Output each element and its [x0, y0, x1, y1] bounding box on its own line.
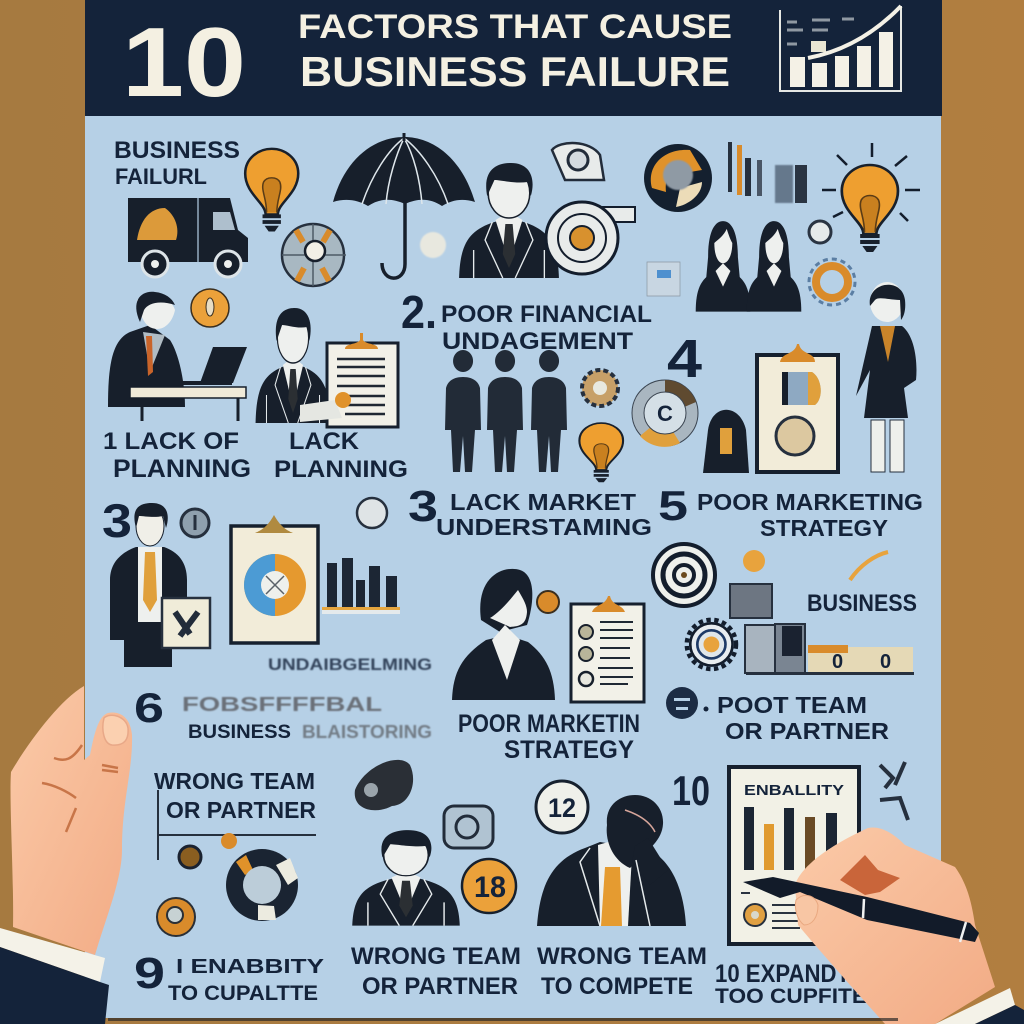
caption: faded understanding: UNDAIBGELMING — [268, 655, 432, 674]
heading: factor 1: 1 LACK OF — [103, 428, 239, 455]
icon: dark cluster — [355, 760, 493, 848]
heading: factor 3: UNDERSTAMING — [436, 514, 652, 540]
bar chart — [322, 558, 400, 614]
figure: man with orange tie — [110, 503, 210, 667]
icon: number 12 badge — [536, 781, 588, 833]
icon: delivery truck — [128, 198, 248, 277]
icon: small gauge — [357, 498, 387, 528]
heading: factor 1 — [103, 428, 251, 483]
title — [298, 8, 732, 95]
icon: service dial — [226, 849, 298, 921]
headline number 10: 10 — [122, 7, 246, 117]
icon: dial — [282, 224, 346, 286]
label: business failure: FAILURL — [115, 164, 207, 189]
heading: factor 5: POOR MARKETING — [697, 489, 923, 515]
icon: lightbulb center — [579, 423, 623, 482]
chart card: ENBALLITY — [744, 782, 844, 799]
figure: man with orange badge: 18 — [474, 871, 506, 904]
heading: inability to cupality: TO CUPALTTE — [168, 982, 318, 1005]
icon: small gears — [809, 221, 855, 305]
heading: factor 5 left: FOBSFFFFBAL — [182, 694, 382, 716]
heading: poor marketing — [458, 710, 640, 764]
heading: inability to cupality: 9 — [134, 949, 165, 998]
icon: donut chart — [644, 144, 712, 212]
icon: dark pawn — [703, 410, 749, 473]
heading: wrong team to compete: WRONG TEAM — [537, 943, 707, 970]
heading: wrong team to compete — [537, 943, 707, 1000]
heading: inability to cupality — [134, 949, 325, 1005]
heading: expand too — [715, 960, 867, 1008]
figure: board with pie — [231, 515, 318, 643]
icon: number plate — [746, 645, 914, 675]
icon: machinery cluster — [730, 584, 805, 674]
icon: small clock — [420, 232, 446, 258]
heading: factor 2: POOR FINANCIAL — [441, 301, 652, 328]
icon: gauge sketch — [552, 143, 604, 180]
icon: small gear top — [181, 509, 209, 537]
icon: target — [653, 544, 715, 606]
figure: man with clipboard — [256, 308, 398, 427]
label: business failure — [114, 137, 240, 189]
heading: poor marketing: POOR MARKETIN — [458, 710, 640, 738]
heading: factor 5: 5 — [658, 482, 688, 529]
figure: stressed man — [537, 795, 686, 926]
icon: large target gauge — [546, 202, 635, 274]
icon: ring chart — [632, 380, 698, 447]
heading: wrong team — [154, 768, 316, 860]
heading: factor 3: LACK MARKET — [450, 489, 636, 515]
heading: wrong team: WRONG TEAM — [154, 768, 315, 794]
chart card — [729, 767, 859, 944]
heading: factor 3 — [408, 482, 652, 540]
heading: factor 1: PLANNING — [113, 455, 251, 483]
title: BUSINESS FAILURE — [300, 48, 730, 95]
heading: factor 5 left — [134, 684, 432, 743]
icon: small orange badge — [537, 591, 559, 613]
label: business failure: BUSINESS — [114, 137, 240, 164]
figure: executive — [459, 163, 559, 278]
heading: expand too: TOO CUPFITE — [715, 985, 867, 1008]
icon: number plate: 0 — [880, 651, 891, 673]
heading: factor 9 — [666, 687, 889, 744]
figure: two women — [696, 221, 801, 312]
title: FACTORS THAT CAUSE — [298, 8, 732, 46]
heading number: 4: 4 — [667, 329, 702, 389]
heading: poor marketing: STRATEGY — [504, 736, 634, 764]
icon: small cog — [582, 370, 618, 406]
figure: man with orange badge — [352, 830, 516, 926]
figure: woman with clipboard — [452, 569, 644, 702]
heading: wrong team or partner — [351, 943, 521, 1000]
infographic sheet — [85, 110, 941, 1018]
heading: factor 3: 3 — [408, 482, 438, 531]
figure: man at laptop — [108, 289, 247, 421]
icon: lightbulb left — [245, 149, 298, 232]
icon: number 12 badge: 12 — [548, 793, 576, 823]
figure: three silhouettes — [445, 350, 567, 472]
heading: factor 2: UNDAGEMENT — [442, 328, 633, 355]
heading: wrong team or partner: OR PARTNER — [362, 973, 518, 1000]
heading: factor 5 left: BUSINESS — [188, 722, 291, 743]
icon: lightbulb right — [822, 143, 920, 252]
heading: lack planning — [274, 428, 408, 483]
icon: ring chart: C — [657, 401, 673, 426]
icon: number plate: 0 — [832, 651, 843, 673]
icon: orange hook — [850, 552, 888, 580]
heading: factor 5: STRATEGY — [760, 515, 888, 541]
heading: business: BUSINESS — [807, 590, 917, 617]
icon: header growth chart — [780, 6, 901, 91]
left hand holding sheet — [0, 686, 132, 1024]
icon: orange dot cluster — [743, 550, 765, 572]
heading: inability to cupality: I ENABBITY — [176, 956, 325, 978]
icon: orange wheel — [157, 846, 201, 936]
icon: small doodle — [880, 762, 908, 820]
sheet bottom edge — [108, 1018, 898, 1021]
icon: umbrella — [333, 133, 475, 278]
icon: orange cog — [687, 620, 736, 669]
right hand holding pen — [743, 828, 1024, 1024]
heading: factor 5 left: BLAISTORING — [302, 722, 432, 742]
heading number: 3 left: 3 — [102, 494, 132, 547]
header banner — [85, 0, 942, 117]
heading: factor 5 left: 6 — [134, 684, 164, 731]
icon: mini bars — [728, 142, 807, 203]
heading: factor 9: POOT TEAM — [717, 692, 867, 718]
heading: expand too: 10 EXPANDT — [715, 960, 850, 988]
figure: presentation clipboard — [757, 344, 838, 472]
heading: factor 5 — [658, 482, 923, 541]
heading number: 10: 10 — [672, 767, 710, 814]
icon: small document — [647, 262, 680, 296]
heading: factor 2 — [401, 286, 652, 355]
heading: lack planning: PLANNING — [274, 456, 408, 483]
figure: standing woman — [856, 282, 916, 472]
heading: wrong team: OR PARTNER — [166, 797, 316, 823]
heading: wrong team or partner: WRONG TEAM — [351, 943, 521, 970]
heading: factor 9: OR PARTNER — [725, 718, 889, 744]
heading: wrong team to compete: TO COMPETE — [541, 973, 693, 1000]
heading: lack planning: LACK — [289, 428, 360, 455]
heading: factor 2: 2. — [401, 286, 437, 338]
